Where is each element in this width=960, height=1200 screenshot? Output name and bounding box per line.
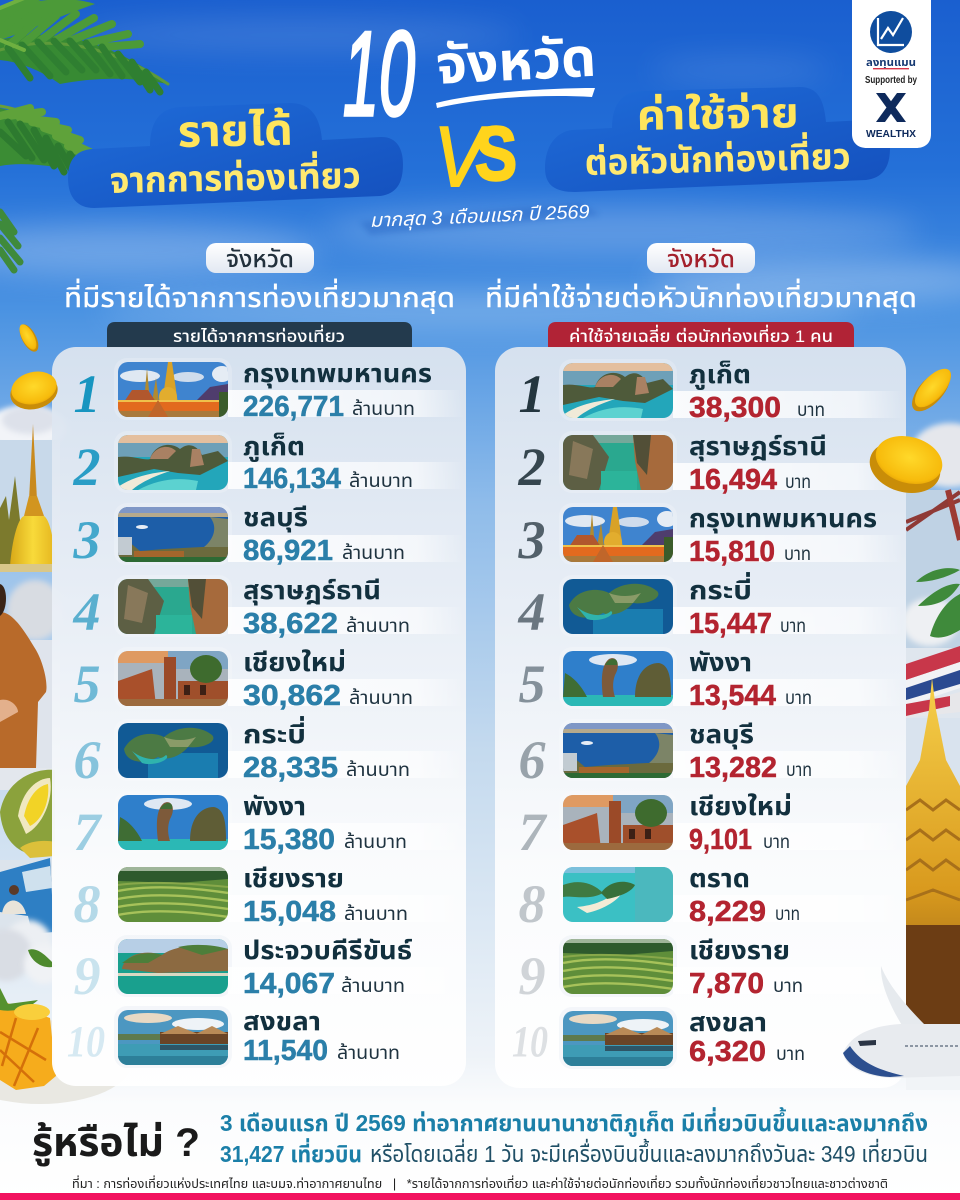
row 8: บาท: [775, 904, 800, 925]
row 8: ตราด: [689, 863, 750, 893]
logo card: Supported by: [865, 75, 917, 86]
row 6: กระบี่: [243, 716, 306, 749]
row 4: 4: [518, 582, 546, 642]
row 10: 6,320: [689, 1036, 766, 1068]
row 4: 4: [72, 582, 100, 642]
row 4: ล้านบาท: [346, 614, 410, 637]
row 1: ภูเก็ต: [689, 359, 751, 390]
row 7: ล้านบาท: [344, 830, 407, 853]
source note: ที่มา : การท่องเที่ยวแห่งประเทศไทย และบมจ.ท่าอากาศยานไทย | *รายได้จากการท่องเที่ยว และค่าใช้จ่ายต่อนักท่องเที่ยว รวมทั้งนักท่องเที่ยวชาวไทยและชาวต่างชาติ: [72, 1175, 888, 1191]
title: 10 provinces: จังหวัด: [434, 28, 597, 96]
bottom bar: [0, 1193, 960, 1200]
title: 10 provinces: 10: [343, 7, 415, 141]
callout: did you know: [32, 1107, 928, 1167]
tab: right panel header: ค่าใช้จ่ายเฉลี่ย ต่อนักท่องเที่ยว 1 คน: [569, 324, 833, 346]
row 7: 9,101: [689, 824, 752, 856]
row 10: [67, 1006, 400, 1068]
tab: right panel header: [548, 322, 854, 348]
row 3: ชลบุรี: [243, 502, 308, 533]
row 9: 9: [518, 946, 546, 1006]
VS: S: [475, 112, 517, 197]
row 9: ประจวบคีรีขันธ์: [243, 935, 412, 965]
row 2: 146,134: [243, 463, 341, 495]
row 2: 16,494: [689, 464, 777, 496]
palm leaves top left: [0, 0, 168, 270]
row 7: 15,380: [243, 824, 335, 856]
row 3: 15,810: [689, 536, 775, 568]
row 10: 10: [67, 1017, 105, 1066]
row 8: 8,229: [689, 896, 766, 928]
panel: revenue title bubble: จากการท่องเที่ยว: [109, 150, 361, 201]
heading: right section: [485, 243, 917, 314]
row 5: 5: [74, 654, 100, 714]
heading: left section: ที่มีรายได้จากการท่องเที่ยวมากสุด: [64, 278, 455, 314]
row 9: 7,870: [689, 968, 764, 1000]
row 5: บาท: [785, 688, 812, 709]
decoration: right side scenery: [902, 423, 960, 1090]
heading: right section: ที่มีค่าใช้จ่ายต่อหัวนักท่องเที่ยวมากสุด: [485, 278, 917, 314]
heading: right section: จังหวัด: [667, 246, 735, 273]
row 4: [72, 575, 464, 642]
row 4: สุราษฎร์ธานี: [243, 575, 381, 606]
callout: did you know: 31,427 เที่ยวบิน: [220, 1138, 362, 1167]
row 2: [518, 431, 903, 497]
row 1: 38,300: [689, 392, 781, 424]
row 10: ล้านบาท: [337, 1041, 400, 1064]
row 1: 1: [74, 364, 100, 424]
row 10: บาท: [776, 1044, 805, 1065]
logo card: [852, 0, 931, 148]
row 2: บาท: [785, 472, 811, 493]
row 2: ภูเก็ต: [243, 431, 305, 462]
row 10: [512, 1007, 805, 1069]
VS: [434, 110, 517, 205]
row 6: 6: [74, 730, 100, 790]
row 9: เชียงราย: [689, 935, 790, 965]
row 3: [72, 502, 464, 570]
row 5: 13,544: [689, 680, 776, 712]
heading: left section: [64, 243, 455, 314]
row 3: ล้านบาท: [342, 541, 405, 564]
panel: spending ranking: [495, 347, 906, 1088]
row 8: [74, 863, 464, 934]
row 6: 13,282: [689, 752, 777, 784]
row 3: บาท: [784, 544, 811, 565]
row 5: เชียงใหม่: [243, 647, 346, 677]
row 9: [74, 935, 464, 1006]
row 7: [518, 791, 903, 862]
row 5: 5: [518, 654, 546, 714]
row 1: [74, 358, 464, 424]
VS: V: [434, 110, 490, 205]
row 8: [518, 863, 903, 934]
logo card: ลงทุนแมน: [866, 57, 916, 69]
heading: left section: จังหวัด: [226, 246, 294, 273]
row 6: 6: [518, 730, 546, 790]
row 1: 1: [518, 364, 546, 424]
row 7: 7: [518, 802, 548, 862]
title: 10 provinces: [343, 7, 597, 141]
row 10: 10: [512, 1017, 548, 1066]
row 3: 3: [72, 510, 100, 570]
panel: spending title bubble: ต่อหัวนักท่องเที่ยว: [584, 130, 851, 183]
tab: left panel header: [107, 322, 412, 348]
panel: revenue title bubble: รายได้: [177, 106, 293, 157]
row 2: สุราษฎร์ธานี: [689, 431, 827, 462]
row 5: ล้านบาท: [349, 686, 413, 709]
row 9: [518, 935, 903, 1006]
row 5: 30,862: [243, 680, 341, 712]
decoration: left side scenery: [0, 406, 132, 1104]
row 6: [518, 719, 903, 790]
row 9: 9: [74, 946, 100, 1006]
row 3: กรุงเทพมหานคร: [689, 503, 877, 534]
tab: left panel header: รายได้จากการท่องเที่ยว: [173, 324, 345, 346]
row 4: กระบี่: [689, 572, 752, 605]
panel: spending title bubble: ค่าใช้จ่าย: [636, 89, 799, 139]
row 2: ล้านบาท: [349, 469, 413, 492]
row 8: 8: [518, 874, 546, 934]
row 6: บาท: [786, 760, 812, 781]
row 10: 11,540: [243, 1035, 328, 1067]
row 8: ล้านบาท: [344, 902, 408, 925]
row 6: [74, 716, 464, 790]
row 2: [72, 431, 464, 497]
row 3: [518, 503, 903, 570]
subtitle: มากสุด 3 เดือนแรก ปี 2569: [369, 202, 590, 232]
row 1: 226,771: [243, 391, 344, 423]
logo card: WEALTHX: [866, 128, 916, 140]
row 7: พังงา: [243, 791, 306, 821]
row 9: ล้านบาท: [341, 974, 405, 997]
row 7: 7: [74, 802, 102, 862]
row 3: 86,921: [243, 535, 333, 567]
row 4: 15,447: [689, 608, 772, 640]
row 3: 3: [518, 510, 546, 570]
decoration: coins right: [864, 363, 957, 501]
row 4: 38,622: [243, 608, 338, 640]
row 1: บาท: [797, 400, 825, 421]
row 10: สงขลา: [243, 1006, 321, 1036]
callout: did you know: รู้หรือไม่ ?: [32, 1120, 200, 1167]
row 5: [74, 647, 464, 714]
row 1: [518, 359, 903, 424]
row 4: บาท: [780, 616, 806, 637]
row 2: 2: [72, 437, 100, 497]
row 5: พังงา: [689, 647, 752, 677]
panel: revenue ranking: [52, 347, 466, 1086]
panel: revenue title bubble: [68, 103, 403, 208]
row 4: [518, 572, 903, 642]
row 6: 28,335: [243, 752, 338, 784]
row 10: สงขลา: [689, 1007, 767, 1037]
row 1: กรุงเทพมหานคร: [243, 358, 432, 389]
row 8: เชียงราย: [243, 863, 344, 893]
icon: airplane: [843, 966, 960, 1078]
decoration: coins left: [7, 321, 61, 414]
row 6: ล้านบาท: [346, 758, 410, 781]
row 7: บาท: [763, 832, 790, 853]
row 2: 2: [518, 437, 546, 497]
row 7: [74, 791, 464, 862]
callout: did you know: 3 เดือนแรก ปี 2569 ท่าอากาศยานนานาชาติภูเก็ต มีเที่ยวบินขึ้นและลงมากถึง: [220, 1107, 928, 1137]
row 6: ชลบุรี: [689, 719, 754, 750]
row 9: 14,067: [243, 968, 335, 1000]
row 5: [518, 647, 903, 714]
row 8: 8: [74, 874, 100, 934]
row 9: บาท: [773, 976, 803, 997]
row 1: ล้านบาท: [352, 397, 415, 420]
row 7: เชียงใหม่: [689, 791, 792, 821]
row 8: 15,048: [243, 896, 336, 928]
panel: spending title bubble: [545, 87, 890, 192]
